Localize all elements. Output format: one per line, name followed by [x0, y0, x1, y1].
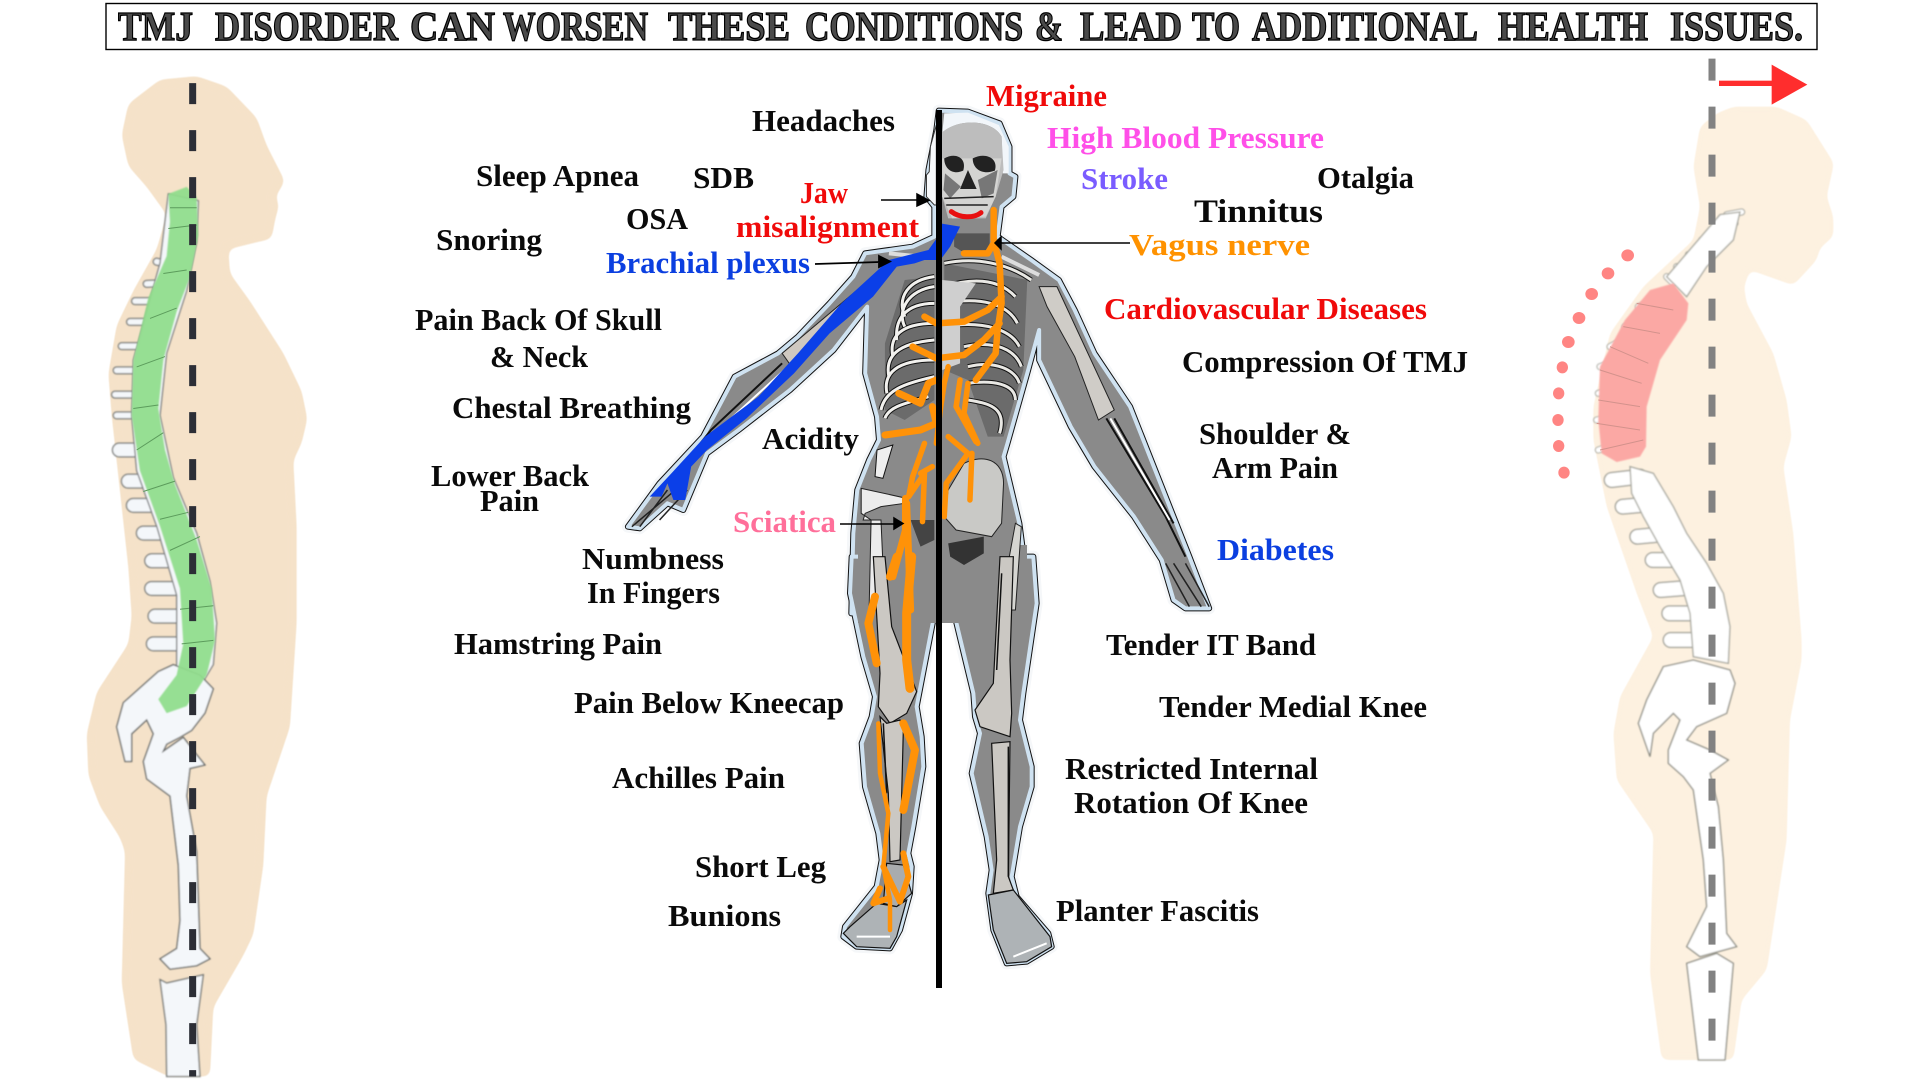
label: compression of TMJ: Compression Of TMJ	[1182, 344, 1468, 379]
leg bones	[843, 557, 1052, 963]
label: pain back of skull and neck	[415, 302, 662, 374]
title: TO	[1192, 3, 1240, 49]
label: achilles pain: Achilles Pain	[612, 760, 785, 795]
title: &	[1035, 3, 1063, 49]
arrow: brachial plexus	[815, 256, 890, 267]
label: pain back of skull and neck: & Neck	[490, 339, 589, 374]
label: jaw misalignment: Jaw	[800, 175, 849, 210]
label: lower back pain	[431, 458, 590, 518]
label: shoulder and arm pain	[1199, 416, 1351, 485]
label: brachial plexus: Brachial plexus	[606, 245, 810, 280]
label: restricted internal rotation of knee: Rotation Of Knee	[1074, 785, 1308, 820]
label: cardiovascular diseases: Cardiovascular Diseases	[1104, 291, 1427, 326]
label: migraine: Migraine	[986, 78, 1107, 113]
title: ADDITIONAL	[1252, 3, 1478, 49]
panel: central skeleton figure	[628, 110, 1209, 988]
arrow: jaw	[881, 194, 929, 206]
label: numbness in fingers	[582, 541, 724, 610]
label: high blood pressure: High Blood Pressure	[1047, 120, 1324, 155]
label: bunions: Bunions	[668, 898, 781, 933]
label: numbness in fingers: Numbness	[582, 541, 724, 576]
silhouette: forward head posture	[1593, 107, 1834, 1060]
label: hamstring pain: Hamstring Pain	[454, 626, 662, 661]
arrow: vagus nerve	[995, 237, 1130, 249]
nerve: brachial plexus	[650, 223, 960, 500]
nerve: vagus and sciatic	[868, 210, 1002, 930]
title: CAN	[410, 3, 495, 49]
label: tender medial knee: Tender Medial Knee	[1159, 689, 1427, 724]
label: planter fascitis: Planter Fascitis	[1056, 893, 1259, 928]
head: cranium right band	[942, 113, 1009, 173]
highlighted spine: kyphosis	[1598, 283, 1688, 462]
spine and bones: forward head posture	[1597, 212, 1742, 1060]
arrow: forward shift	[1719, 65, 1807, 105]
label: diabetes: Diabetes	[1217, 532, 1334, 567]
arm bones	[632, 263, 1209, 607]
panel: healthy posture figure	[87, 76, 307, 1077]
title: ISSUES.	[1670, 3, 1803, 49]
label: jaw misalignment	[736, 175, 920, 244]
title: HEALTH	[1498, 3, 1648, 49]
label: SDB: SDB	[693, 160, 754, 195]
label: tinnitus: Tinnitus	[1194, 194, 1323, 230]
label: chestal breathing: Chestal Breathing	[452, 390, 691, 425]
title: THESE	[668, 3, 790, 49]
label: snoring: Snoring	[436, 222, 542, 257]
highlighted spine: healthy alignment	[132, 187, 215, 713]
body silhouette: halo, outline and shading	[628, 111, 1209, 963]
title: CONDITIONS	[805, 3, 1023, 49]
label: vagus nerve: Vagus nerve	[1129, 227, 1310, 262]
title: DISORDER	[215, 3, 398, 49]
label: shoulder and arm pain: Arm Pain	[1212, 450, 1338, 485]
label: sciatica: Sciatica	[733, 504, 836, 539]
dotted curve: spine curvature	[1552, 249, 1634, 479]
spine and bones: healthy posture	[115, 194, 217, 1077]
dashed plumb line: healthy	[189, 83, 196, 1077]
title: TMJ	[118, 3, 193, 49]
label: jaw misalignment: misalignment	[736, 209, 920, 244]
skeleton: lower	[843, 557, 1052, 963]
label: tender IT band: Tender IT Band	[1106, 627, 1316, 662]
skeleton: upper	[632, 113, 1209, 610]
dashed plumb line: forward head	[1708, 59, 1715, 1063]
label: OSA: OSA	[626, 201, 689, 236]
label: numbness in fingers: In Fingers	[587, 575, 720, 610]
label: lower back pain: Lower Back	[431, 458, 590, 493]
rib cage	[881, 253, 1039, 437]
label: acidity: Acidity	[762, 421, 860, 456]
labels	[415, 78, 1468, 933]
label: headaches: Headaches	[752, 103, 895, 138]
pelvis	[861, 445, 1021, 610]
label: otalgia: Otalgia	[1317, 160, 1414, 195]
skull	[941, 122, 1004, 255]
label: sleep apnea: Sleep Apnea	[476, 158, 639, 193]
label: short leg: Short Leg	[695, 849, 826, 884]
label: shoulder and arm pain: Shoulder &	[1199, 416, 1351, 451]
label: restricted internal rotation of knee: Restricted Internal	[1065, 751, 1318, 786]
silhouette: healthy posture	[87, 76, 307, 1077]
title: WORSEN	[503, 3, 648, 49]
label: pain below kneecap: Pain Below Kneecap	[574, 685, 844, 720]
arrow: sciatica	[840, 518, 903, 529]
title: LEAD	[1080, 3, 1182, 49]
label: lower back pain: Pain	[480, 483, 539, 518]
label: pain back of skull and neck: Pain Back Of Skull	[415, 302, 662, 337]
center divider line	[936, 110, 942, 988]
panel: forward head posture figure	[1552, 59, 1834, 1063]
title	[106, 3, 1817, 50]
label: stroke: Stroke	[1081, 161, 1168, 196]
label: restricted internal rotation of knee	[1065, 751, 1318, 820]
head: left side sliver	[926, 125, 936, 205]
